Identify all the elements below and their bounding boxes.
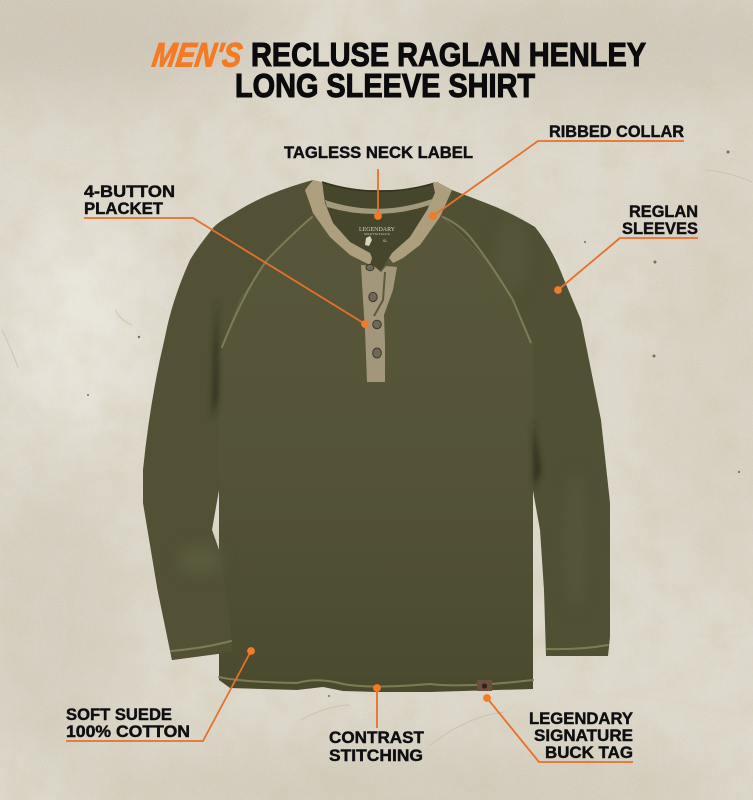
torn edge of collar back <box>322 182 435 191</box>
tag mark <box>482 683 487 689</box>
leader line <box>377 169 379 216</box>
anchor dot <box>554 286 562 294</box>
leader line <box>376 688 378 728</box>
neck label buck mark <box>365 236 372 246</box>
buttons <box>366 264 381 358</box>
anchor dot <box>373 684 381 692</box>
cuff stitching right <box>547 645 608 649</box>
shirt illustration <box>143 180 610 692</box>
callout: contrast stitching <box>329 684 425 765</box>
label line two: PLACKET <box>84 199 164 218</box>
body <box>219 190 533 692</box>
label line two: SIGNATURE <box>534 726 633 745</box>
anchor dot <box>374 212 382 220</box>
neck label sub brand: WHITETAILS <box>364 232 390 236</box>
left sleeve <box>143 180 313 660</box>
label line two: 100% COTTON <box>66 722 190 741</box>
callout: tagless neck label <box>284 143 473 220</box>
anchor dot <box>361 320 369 328</box>
raglan seam right <box>443 217 531 343</box>
leader line <box>433 141 684 216</box>
callout: ribbed collar <box>429 122 684 220</box>
leader line <box>558 238 698 290</box>
fold shading <box>178 215 585 610</box>
title <box>150 36 646 104</box>
neck interior <box>322 182 435 272</box>
leader line <box>84 218 365 324</box>
label text: RIBBED COLLAR <box>549 122 684 141</box>
label line one: REGLAN <box>629 202 698 221</box>
title: MEN'S brush accent: MEN'S <box>150 37 245 74</box>
anchor dot <box>247 647 255 655</box>
leader line <box>487 698 633 762</box>
label line one: CONTRAST <box>329 728 425 747</box>
label line three: BUCK TAG <box>545 743 633 762</box>
tag patch <box>477 680 492 691</box>
buck tag <box>477 680 492 691</box>
title: second line: LONG SLEEVE SHIRT <box>235 67 535 104</box>
back neck band <box>325 199 432 214</box>
right sleeve <box>437 182 610 656</box>
contrast hem stitching <box>219 677 533 686</box>
callout: legendary signature buck tag <box>483 694 634 762</box>
callout: 4-button placket <box>84 182 369 328</box>
label line one: LEGENDARY <box>529 709 634 728</box>
neck label print <box>359 226 395 246</box>
title: first line: RECLUSE RAGLAN HENLEY <box>251 36 646 73</box>
neck label size: XL <box>383 238 388 243</box>
label line one: 4-BUTTON <box>84 182 175 201</box>
callout: soft suede cotton <box>66 647 255 741</box>
ribbed collar left <box>305 180 372 265</box>
label text: TAGLESS NECK LABEL <box>284 143 473 162</box>
cuff stitching left <box>171 641 231 651</box>
placket <box>361 265 397 382</box>
placket fold <box>374 272 385 316</box>
label line two: SLEEVES <box>622 219 698 238</box>
anchor dot <box>483 694 491 702</box>
raglan seam left <box>222 217 312 347</box>
leader line <box>66 651 251 741</box>
anchor dot <box>429 212 437 220</box>
label line one: SOFT SUEDE <box>66 705 172 724</box>
sleeve over body at left cuff <box>157 520 232 660</box>
neck label brand: LEGENDARY <box>359 226 395 233</box>
callout: reglan sleeves <box>554 202 698 294</box>
label line two: STITCHING <box>329 746 423 765</box>
ribbed collar right <box>389 182 452 263</box>
